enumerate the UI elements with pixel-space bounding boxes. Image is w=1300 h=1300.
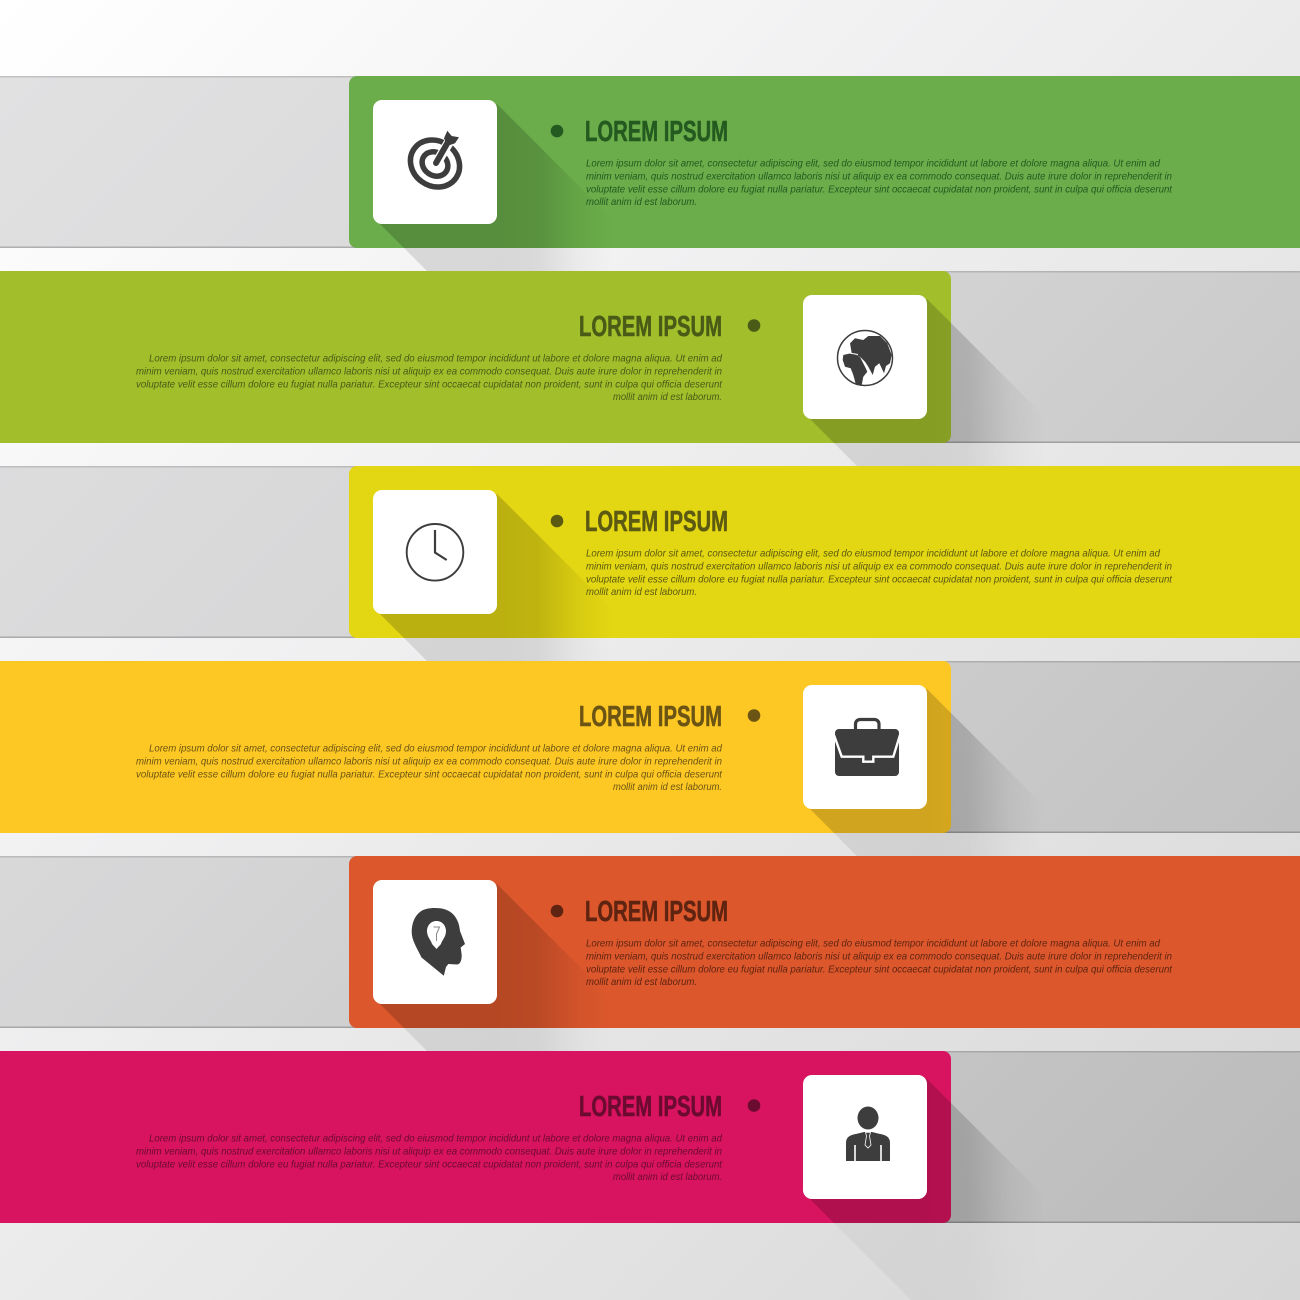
bullet dot (551, 125, 563, 137)
body text: Lorem ipsum dolor sit amet, consectetur adipiscing elit, sed do eiusmod tempor incididunt ut labore et dolore magna aliqua. Ut enim ad (586, 158, 1160, 170)
body text: Lorem ipsum dolor sit amet, consectetur adipiscing elit, sed do eiusmod tempor incididunt ut labore et dolore magna aliqua. Ut enim ad (586, 548, 1160, 560)
body text (586, 548, 1173, 598)
body text: Lorem ipsum dolor sit amet, consectetur adipiscing elit, sed do eiusmod tempor incididunt ut labore et dolore magna aliqua. Ut enim ad (149, 1134, 722, 1144)
body text: mollit anim id est laborum. (586, 977, 697, 988)
body text: voluptate velit esse cillum dolore eu fugiat nulla pariatur. Excepteur sint occaecat cupidatat non proident, sunt in culpa qui officia deserunt (136, 380, 723, 390)
panel: row 3 yellow (349, 466, 1300, 663)
white icon card (373, 880, 497, 1004)
body text: voluptate velit esse cillum dolore eu fugiat nulla pariatur. Excepteur sint occaecat cupidatat non proident, sunt in culpa qui officia deserunt (586, 574, 1173, 586)
long shadow on bottom area (834, 1223, 1148, 1300)
heading: LOREM IPSUM (585, 116, 728, 148)
long shadow on band (380, 884, 641, 1028)
long shadow on band and strip (810, 689, 1071, 833)
heading: LOREM IPSUM (585, 506, 728, 538)
body text: minim veniam, quis nostrud exercitation ullamco laboris nisi ut aliquip ex ea commodo consequat. Duis aute irure dolor in reprehenderit in (586, 952, 1172, 962)
long shadow on gap (834, 833, 1096, 858)
body text (586, 938, 1173, 988)
long shadow on band and strip (810, 1079, 1071, 1223)
panel: row 6 magenta (0, 1051, 1148, 1300)
body text: minim veniam, quis nostrud exercitation ullamco laboris nisi ut aliquip ex ea commodo consequat. Duis aute irure dolor in reprehenderit in (136, 756, 722, 768)
heading: LOREM IPSUM (579, 701, 722, 733)
heading: LOREM IPSUM (579, 1091, 722, 1123)
magenta band (0, 1051, 951, 1223)
long shadow on gap (834, 443, 1096, 468)
heading: LOREM IPSUM (585, 896, 728, 928)
bullet dot (748, 709, 760, 722)
icon: target with arrow (401, 130, 469, 197)
white icon card (373, 490, 497, 614)
orange band (349, 856, 1300, 1028)
long shadow on gap (404, 638, 666, 663)
white icon card (803, 1075, 927, 1199)
bullet dot (748, 1099, 760, 1112)
body text: mollit anim id est laborum. (586, 197, 697, 208)
long shadow on band and strip (810, 299, 1071, 443)
body text: voluptate velit esse cillum dolore eu fugiat nulla pariatur. Excepteur sint occaecat cupidatat non proident, sunt in culpa qui officia deserunt (136, 770, 723, 780)
body text: minim veniam, quis nostrud exercitation ullamco laboris nisi ut aliquip ex ea commodo consequat. Duis aute irure dolor in reprehenderit in (586, 172, 1172, 182)
green band (349, 76, 1300, 248)
body text (136, 354, 723, 403)
bullet dot (748, 319, 760, 332)
white icon card (373, 100, 497, 224)
icon: briefcase (834, 720, 900, 776)
body text: minim veniam, quis nostrud exercitation ullamco laboris nisi ut aliquip ex ea commodo consequat. Duis aute irure dolor in reprehenderit in (586, 562, 1172, 572)
bullet dot (551, 905, 563, 917)
body text: mollit anim id est laborum. (613, 1172, 722, 1183)
body text: Lorem ipsum dolor sit amet, consectetur adipiscing elit, sed do eiusmod tempor incididunt ut labore et dolore magna aliqua. Ut enim ad (149, 354, 722, 364)
body text: minim veniam, quis nostrud exercitation ullamco laboris nisi ut aliquip ex ea commodo consequat. Duis aute irure dolor in reprehenderit in (136, 366, 722, 378)
body text: voluptate velit esse cillum dolore eu fugiat nulla pariatur. Excepteur sint occaecat cupidatat non proident, sunt in culpa qui officia deserunt (586, 964, 1173, 976)
panel: row 1 green (349, 76, 1300, 273)
body text: voluptate velit esse cillum dolore eu fugiat nulla pariatur. Excepteur sint occaecat cupidatat non proident, sunt in culpa qui officia deserunt (136, 1160, 723, 1170)
icon: globe (838, 330, 892, 386)
panel: row 4 amber (0, 661, 1096, 858)
long shadow on band (380, 494, 641, 638)
body text: Lorem ipsum dolor sit amet, consectetur adipiscing elit, sed do eiusmod tempor incididunt ut labore et dolore magna aliqua. Ut enim ad (586, 938, 1160, 950)
amber band (0, 661, 951, 833)
body text: mollit anim id est laborum. (613, 392, 722, 403)
yellow band (349, 466, 1300, 638)
lime band (0, 271, 951, 443)
body text (136, 744, 723, 793)
long shadow on gap (404, 1028, 666, 1053)
body text: minim veniam, quis nostrud exercitation ullamco laboris nisi ut aliquip ex ea commodo consequat. Duis aute irure dolor in reprehenderit in (136, 1146, 722, 1158)
panel: row 2 lime (0, 271, 1096, 468)
body text (586, 158, 1173, 208)
white icon card (803, 295, 927, 419)
icon: businessperson (846, 1106, 890, 1161)
bullet dot (551, 515, 563, 527)
panel: row 5 orange (349, 856, 1300, 1053)
white icon card (803, 685, 927, 809)
icon: head with light bulb (412, 908, 465, 976)
heading: LOREM IPSUM (579, 311, 722, 343)
long shadow on gap (404, 248, 666, 273)
body text: voluptate velit esse cillum dolore eu fugiat nulla pariatur. Excepteur sint occaecat cupidatat non proident, sunt in culpa qui officia deserunt (586, 184, 1173, 196)
icon: clock (407, 524, 463, 581)
body text: mollit anim id est laborum. (613, 782, 722, 793)
body text (136, 1134, 723, 1183)
body text: Lorem ipsum dolor sit amet, consectetur adipiscing elit, sed do eiusmod tempor incididunt ut labore et dolore magna aliqua. Ut enim ad (149, 744, 722, 754)
body text: mollit anim id est laborum. (586, 587, 697, 598)
long shadow on band (380, 104, 641, 248)
